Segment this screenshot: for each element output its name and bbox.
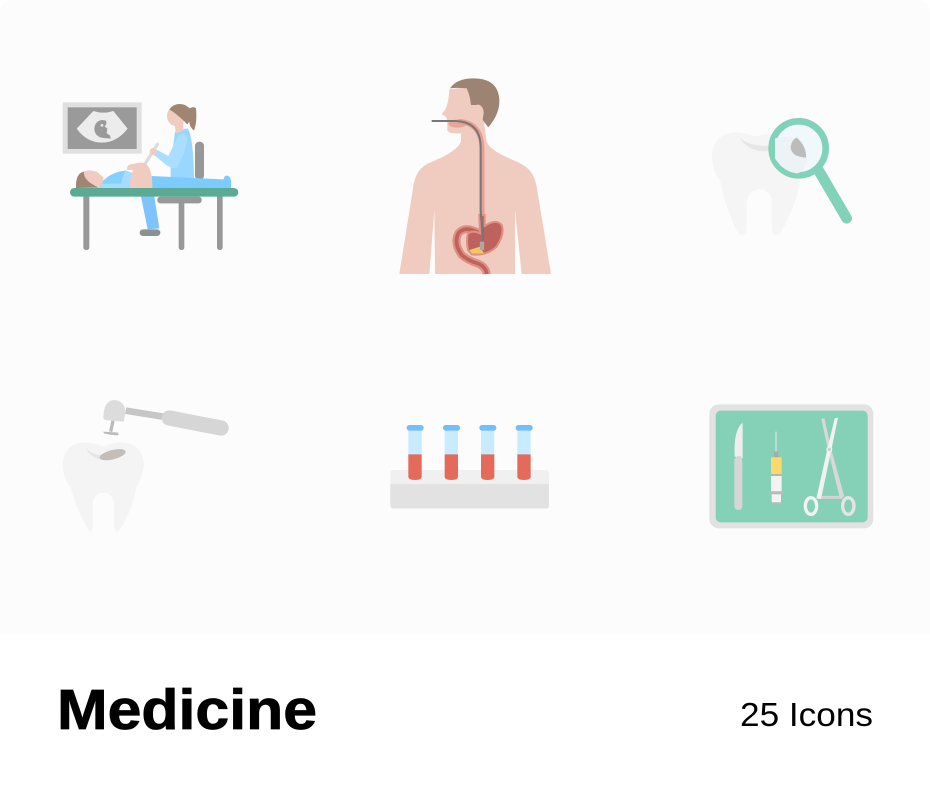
- icon: dental drill: [63, 400, 221, 532]
- tube rack back: [390, 470, 549, 508]
- examination table: [70, 188, 238, 250]
- ultrasound monitor: [63, 102, 142, 154]
- forceps: [805, 418, 854, 514]
- tooth: [63, 442, 144, 532]
- icon: surgical tray: [709, 404, 873, 528]
- sonographer: [140, 104, 196, 236]
- cavity: [99, 447, 127, 462]
- icon count: 25 Icons: [740, 696, 873, 733]
- mouth and esophagus: [448, 120, 482, 217]
- ear: [472, 105, 484, 121]
- tooth: [712, 132, 802, 235]
- icon: endoscopy: [399, 78, 551, 274]
- drill handpiece: [103, 400, 221, 435]
- test tube 4: [516, 425, 533, 480]
- endoscope: [432, 121, 483, 250]
- title: Medicine: [57, 678, 317, 742]
- tooth groove: [86, 448, 102, 460]
- tray: [709, 404, 873, 528]
- tube rack front: [390, 484, 549, 508]
- chair: [157, 142, 204, 250]
- magnifier: [772, 121, 847, 218]
- test tube 2: [443, 425, 460, 480]
- syringe: [769, 432, 784, 504]
- patient: [76, 163, 231, 188]
- test tube 3: [479, 425, 496, 480]
- body: [399, 87, 551, 274]
- icon: tooth under magnifier: [712, 121, 847, 235]
- stomach: [456, 215, 503, 274]
- icon: blood test tubes: [390, 425, 549, 508]
- scalpel: [734, 423, 743, 510]
- hair: [450, 78, 499, 127]
- icon: ultrasound examination: [63, 102, 238, 250]
- tooth groove: [739, 138, 770, 151]
- test tube 1: [407, 425, 424, 480]
